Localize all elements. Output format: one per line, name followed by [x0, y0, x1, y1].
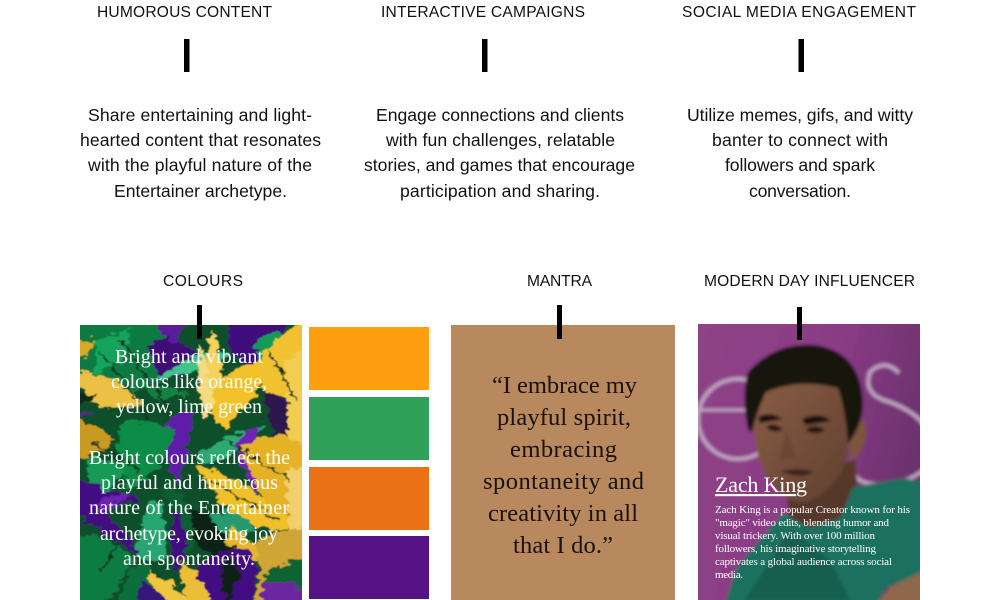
- mantra quote: that I do.”: [513, 532, 613, 559]
- text block: social media engagement: conversation.: [749, 181, 851, 201]
- text block: colours description: [89, 346, 290, 570]
- heading: modern day influencer: MODERN DAY INFLUENCER: [704, 273, 915, 290]
- text block: colours description: archetype, evoking joy: [100, 523, 278, 545]
- text block: colours description: nature of the Entertainer: [89, 497, 289, 519]
- text block: interactive campaigns: [364, 105, 635, 201]
- text block: social media engagement: [687, 105, 913, 201]
- text block: colours description: playful and humorous: [101, 472, 278, 494]
- divider bar: [557, 305, 562, 339]
- text block: interactive campaigns: Engage connections and clients: [376, 105, 624, 125]
- swatch: orange: [309, 467, 429, 530]
- text block: colours description: Bright and vibrant: [115, 346, 263, 368]
- heading: interactive campaigns: INTERACTIVE CAMPAIGNS: [381, 4, 585, 21]
- text block: humorous content: Entertainer archetype.: [114, 181, 287, 201]
- panel: mantra: [451, 305, 675, 600]
- mantra quote: playful spirit,: [497, 404, 631, 431]
- influencer bio: followers, his imaginative storytelling: [715, 543, 876, 555]
- text block: colours description: colours like orange,: [111, 371, 267, 393]
- divider bar: [482, 39, 488, 72]
- text block: interactive campaigns: with fun challenges, relatable: [385, 130, 615, 150]
- influencer bio: "magic" video edits, blending humor and: [715, 517, 890, 529]
- heading: humorous content: HUMOROUS CONTENT: [97, 4, 272, 21]
- mantra quote: “I embrace my: [492, 372, 638, 399]
- text block: social media engagement: banter to connect with: [712, 130, 888, 150]
- influencer bio: [715, 504, 910, 581]
- influencer bio: media.: [715, 569, 743, 581]
- text block: social media engagement: Utilize memes, gifs, and witty: [687, 105, 913, 125]
- mantra quote: spontaneity and: [483, 468, 644, 495]
- panel: colours feather image: [70, 305, 312, 600]
- text block: colours description: Bright colours reflect the: [89, 447, 290, 469]
- text block: humorous content: hearted content that resonates: [80, 130, 321, 150]
- divider bar: [797, 307, 802, 340]
- text block: humorous content: Share entertaining and light-: [88, 105, 312, 125]
- heading: colours: COLOURS: [163, 273, 243, 290]
- influencer name: Zach King: [715, 472, 807, 497]
- text block: humorous content: with the playful nature of the: [87, 155, 312, 175]
- colour swatches: [309, 327, 429, 599]
- panel: influencer: [690, 307, 928, 600]
- mantra quote: creativity in all: [488, 500, 638, 527]
- image: colourful feathers: [80, 325, 302, 600]
- influencer bio: visual trickery. With over 100 million: [715, 530, 876, 542]
- mantra background: [451, 325, 675, 600]
- column: interactive campaigns: [364, 4, 635, 201]
- swatch: purple: [309, 536, 429, 599]
- swatch: amber: [309, 327, 429, 390]
- heading: social media engagement: SOCIAL MEDIA ENGAGEMENT: [682, 4, 916, 21]
- mantra quote: embracing: [510, 436, 617, 463]
- swatch: green: [309, 397, 429, 460]
- mantra quote: [483, 372, 644, 559]
- text block: humorous content: [80, 105, 321, 201]
- image: portrait of Zach King: [690, 316, 928, 600]
- influencer bio: Zach King is a popular Creator known for his: [715, 504, 910, 516]
- divider bar: [184, 39, 190, 72]
- text block: social media engagement: followers and spark: [725, 155, 875, 175]
- text block: interactive campaigns: stories, and games that encourage: [364, 155, 635, 175]
- divider bar: [197, 305, 202, 339]
- heading: mantra: MANTRA: [527, 273, 593, 290]
- text block: colours description: and spontaneity.: [123, 548, 255, 570]
- text block: interactive campaigns: participation and sharing.: [400, 181, 600, 201]
- influencer bio: captivates a global audience across social: [715, 556, 892, 568]
- column: social media engagement: [682, 4, 916, 201]
- divider bar: [798, 39, 804, 72]
- text block: colours description: yellow, lime green: [116, 396, 262, 418]
- column: humorous content: [80, 4, 321, 201]
